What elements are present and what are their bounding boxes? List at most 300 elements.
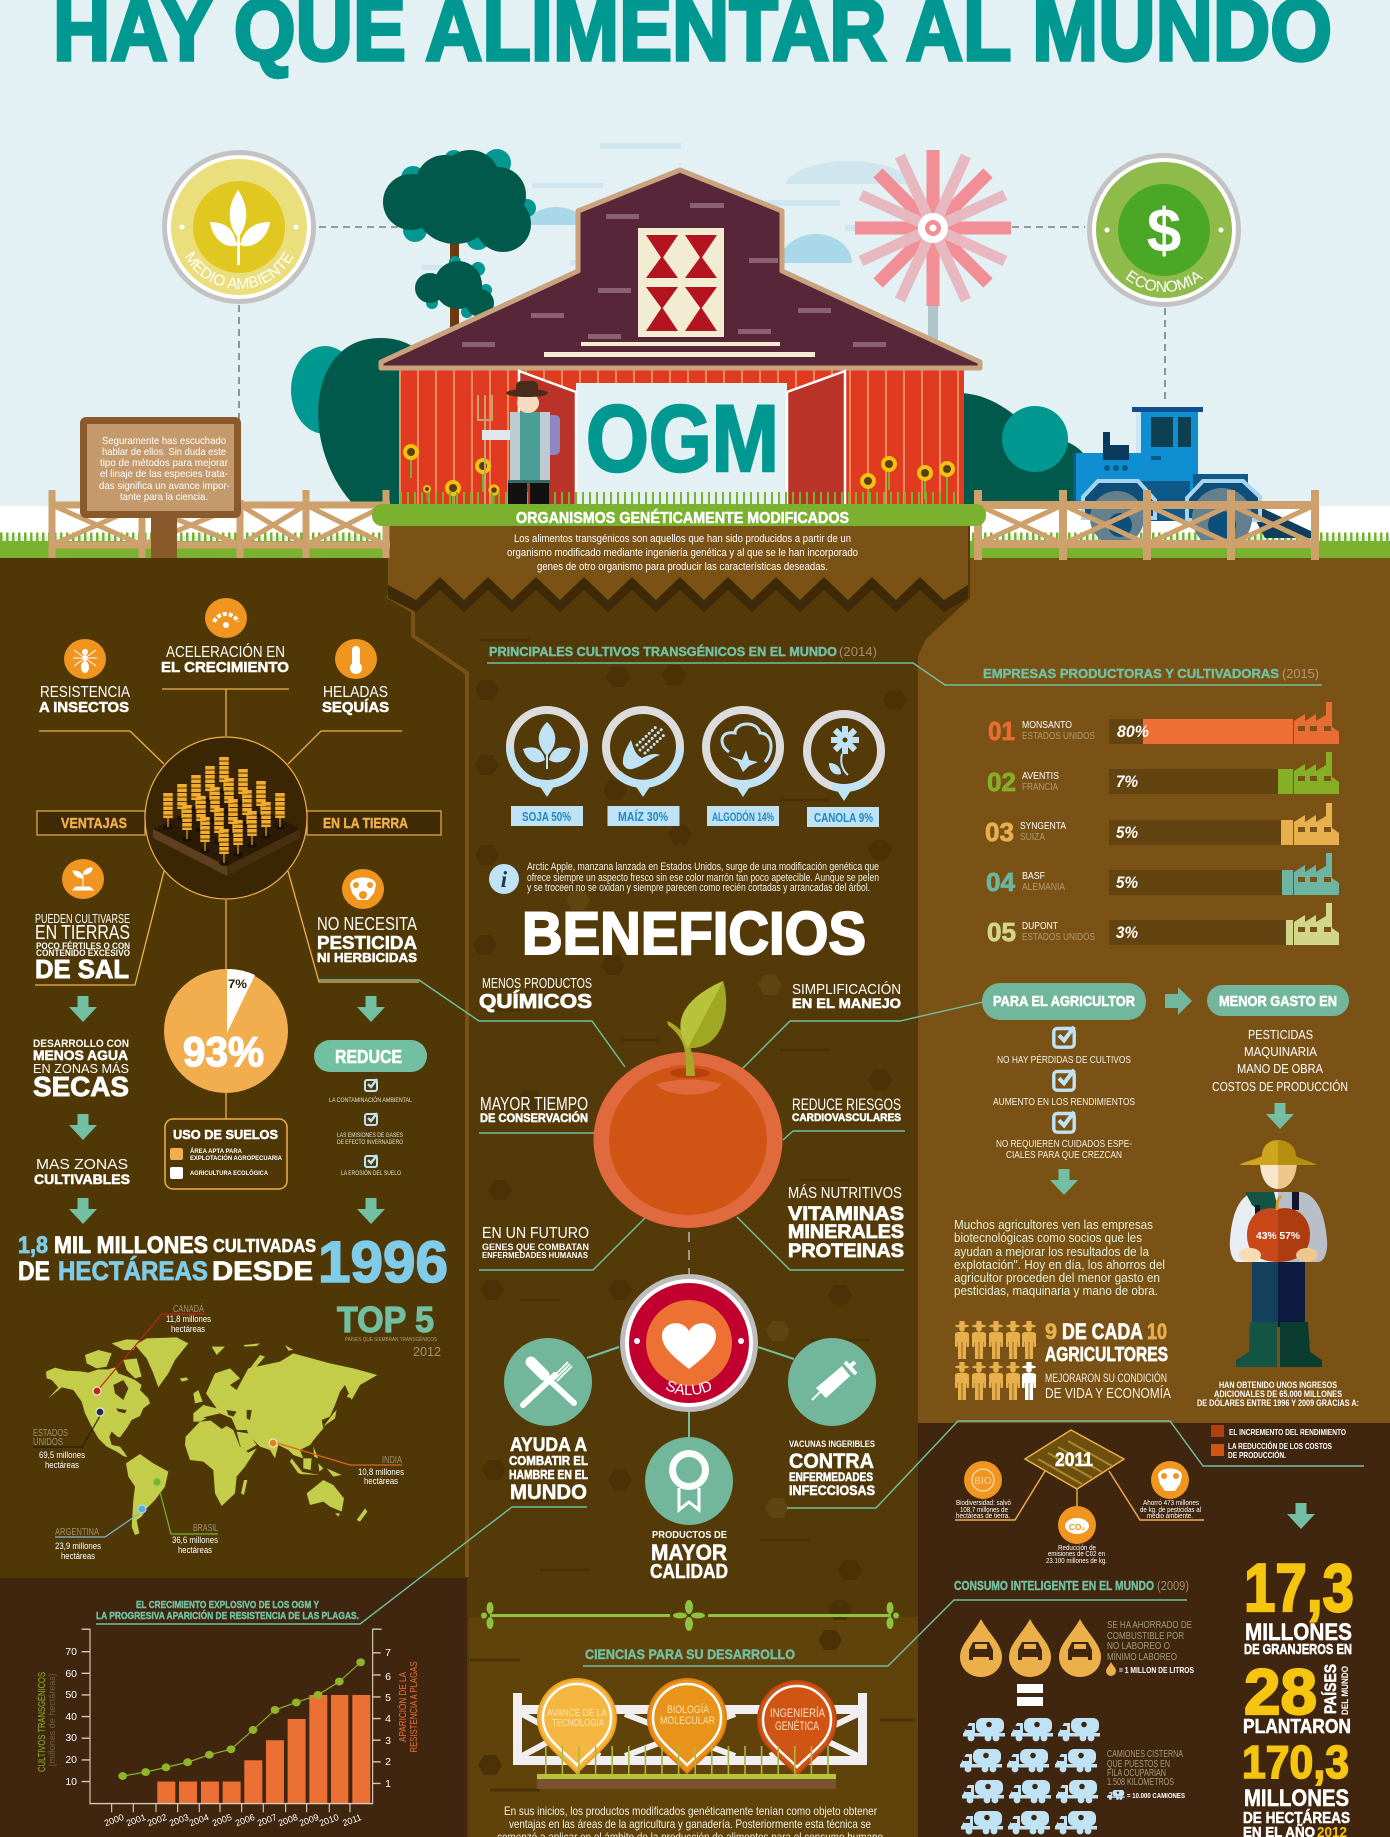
tractor xyxy=(1073,407,1315,548)
map labels: hectáreas xyxy=(178,1545,212,1555)
map labels xyxy=(33,1302,404,1561)
connector lines xyxy=(35,689,419,1119)
illustration: apple xyxy=(594,981,782,1228)
fuel notes: QUE PUESTOS EN xyxy=(1107,1759,1170,1770)
list: menor gasto: COSTOS DE PRODUCCIÓN xyxy=(1212,1079,1348,1094)
pin: ingenieria genetica: GENÉTICA xyxy=(775,1720,819,1733)
fuel notes xyxy=(1106,1620,1194,1800)
chart axis labels: 20 xyxy=(65,1754,77,1766)
pin: biologia molecular: BIOLOGÍA xyxy=(667,1703,710,1716)
OGM label: OGM xyxy=(586,386,779,492)
health: hambre: COMBATIR EL xyxy=(509,1453,588,1468)
health: calidad: PRODUCTOS DE xyxy=(652,1529,727,1541)
left column benefits: PUEDEN CULTIVARSE xyxy=(35,911,130,926)
income legend: EL INCREMENTO DEL RENDIMIENTO xyxy=(1229,1427,1346,1437)
barn xyxy=(381,170,980,506)
wooden sign: das significa un avance impor- xyxy=(99,480,230,492)
paragraph: agricultores: ayudan a mejorar los resultados de la xyxy=(954,1244,1150,1259)
info note: arctic apple: i xyxy=(501,867,508,892)
ventajas ribbon: VENTAJAS xyxy=(61,815,127,832)
stats: granjeros: DEL MUNDO xyxy=(1340,1666,1350,1715)
crop: maiz: MAÍZ 30% xyxy=(618,809,668,824)
company: syngenta: 5% xyxy=(1116,823,1138,842)
benefits labels: EN EL MANEJO xyxy=(792,995,901,1011)
benefits labels: MAYOR TIEMPO xyxy=(480,1094,588,1114)
income legend: LA REDUCCIÓN DE LOS COSTOS xyxy=(1228,1440,1332,1451)
health: vacunas: VACUNAS INGERIBLES xyxy=(789,1439,875,1449)
benefits labels: SIMPLIFICACIÓN xyxy=(792,981,901,998)
paragraph: agricultores: biotecnológicas como socios que les xyxy=(954,1230,1142,1245)
intro text: genes de otro organismo para producir las características deseadas. xyxy=(537,561,828,573)
reduce list: LAS EMISIONES DE GASES xyxy=(337,1132,404,1139)
heading: consumo inteligente: CONSUMO INTELIGENTE EN EL MUNDO xyxy=(954,1578,1154,1593)
arrow: to totals xyxy=(1287,1503,1315,1529)
stats: granjeros: 17,3 xyxy=(1244,1550,1354,1626)
chart: crecimiento y resistencia: 2011 xyxy=(341,1812,363,1828)
left column benefits: CONTENIDO EXCESIVO xyxy=(36,948,130,958)
fuel notes: CAMIONES CISTERNA xyxy=(1107,1749,1183,1760)
tanker trucks xyxy=(960,1718,1100,1834)
icon: gas mask xyxy=(342,869,384,909)
fuel notes: 1.508 KILÓMETROS xyxy=(1107,1775,1174,1788)
intro text: organismo modificado mediante ingeniería genética y al que se le han incorporado xyxy=(507,547,858,559)
stats: granjeros: 28 xyxy=(1244,1656,1317,1728)
left column benefits: DE SAL xyxy=(35,954,129,984)
heading: consumo inteligente: (2009) xyxy=(1157,1578,1189,1593)
company: basf: ALEMANIA xyxy=(1022,882,1065,893)
map labels: 10,8 millones xyxy=(358,1467,404,1477)
company: monsanto: 80% xyxy=(1117,722,1149,741)
company: aventis xyxy=(987,752,1339,797)
benefits labels: REDUCE RIESGOS xyxy=(792,1095,901,1114)
illustration: farmer with pumpkin xyxy=(1230,1140,1327,1367)
crop: algodon: ALGODÓN 14% xyxy=(712,809,774,824)
no necesita pesticida xyxy=(317,914,417,965)
paragraph: agricultores: Muchos agricultores ven las empresas xyxy=(954,1217,1153,1232)
center soil with zigzag xyxy=(388,526,968,612)
wooden sign: hablar de ellos. Sin duda este xyxy=(102,446,226,458)
country callouts xyxy=(33,1314,402,1537)
chart: crecimiento y resistencia: 2004 xyxy=(188,1812,210,1828)
chart: crecimiento y resistencia: (millones de hectáreas) xyxy=(47,1673,57,1767)
map labels: 69,5 millones xyxy=(39,1450,85,1460)
pill: menor gasto en: MENOR GASTO EN xyxy=(1219,993,1337,1010)
pin: ingenieria genetica xyxy=(758,1681,836,1775)
company: aventis: AVENTIS xyxy=(1022,771,1059,782)
left column benefits: EN TIERRAS xyxy=(35,922,130,944)
top 5 heading xyxy=(337,1299,441,1359)
paragraph: agricultores xyxy=(954,1217,1165,1298)
heading: principales cultivos: PRINCIPALES CULTIVOS TRANSGÉNICOS EN EL MUNDO xyxy=(489,644,837,659)
benefits labels: MÁS NUTRITIVOS xyxy=(788,1183,902,1202)
left column benefits: EN ZONAS MÁS xyxy=(33,1061,129,1076)
farmer benefits checklist: NO HAY PÉRDIDAS DE CULTIVOS xyxy=(997,1053,1131,1066)
labels: RESISTENCIA xyxy=(40,684,130,701)
icon: ant xyxy=(64,639,106,679)
2011 impact diagram xyxy=(955,1430,1204,1565)
company: aventis: 02 xyxy=(987,767,1016,797)
benefits labels xyxy=(479,975,904,1262)
badge: economia: ECONOMIA xyxy=(1126,270,1204,292)
company: monsanto: ESTADOS UNIDOS xyxy=(1022,731,1095,742)
2011 impact diagram: de kg. de pesticidas al xyxy=(1140,1505,1201,1514)
2011 impact diagram: 23.100 millones de kg. xyxy=(1046,1556,1107,1565)
chart axis labels: 3 xyxy=(385,1735,391,1747)
farmer with pitchfork xyxy=(478,381,560,505)
chart: crecimiento y resistencia: 2001 xyxy=(125,1812,147,1828)
paragraph: agricultores: pesticidas, maquinaria y mano de obra. xyxy=(954,1283,1158,1298)
labels xyxy=(39,642,389,716)
reduce list xyxy=(314,1040,427,1177)
wooden sign: el linaje de las especies trata- xyxy=(100,468,228,480)
left column benefits: MAS ZONAS xyxy=(36,1156,128,1173)
company: monsanto xyxy=(988,702,1339,746)
income note xyxy=(1197,1380,1359,1409)
chart: crecimiento y resistencia: 2003 xyxy=(168,1812,190,1828)
stats: granjeros: PLANTARON xyxy=(1243,1716,1351,1738)
benefits labels: QUÍMICOS xyxy=(479,990,592,1013)
no necesita pesticida: PESTICIDA xyxy=(317,933,417,953)
wheat field illustration xyxy=(145,737,307,899)
2011 impact diagram: Ahorró 473 millones xyxy=(1143,1498,1199,1507)
company: syngenta: SYNGENTA xyxy=(1020,821,1066,832)
illustration: farmer with pumpkin: 43% 57% xyxy=(1256,1231,1300,1242)
health: vacunas xyxy=(788,1338,876,1498)
no necesita pesticida: NI HERBICIDAS xyxy=(317,950,417,965)
fuel notes: = 1 MILLON DE LITROS xyxy=(1119,1665,1194,1675)
chart title xyxy=(96,1599,359,1622)
left column benefits: SECAS xyxy=(33,1071,129,1102)
chart: crecimiento y resistencia xyxy=(35,1599,420,1828)
barn roof xyxy=(381,170,980,368)
dashed connectors xyxy=(239,227,1165,590)
icon: bio: BIO xyxy=(974,1476,992,1487)
stats: granjeros: 170,3 xyxy=(1242,1736,1349,1788)
icon: acceleration gauge xyxy=(205,598,247,638)
legend: uso de suelos: EXPLOTACIÓN AGROPECUARIA xyxy=(190,1153,282,1162)
2011 impact diagram: 2011 xyxy=(1055,1450,1093,1471)
icon: co2 xyxy=(1058,1506,1096,1544)
pie chart: uso de suelos: 7% xyxy=(228,977,247,991)
labels: HELADAS xyxy=(323,684,388,701)
left column benefits: CULTIVABLES xyxy=(34,1171,130,1187)
chart: crecimiento y resistencia: CULTIVOS TRANSGÉNICOS xyxy=(35,1672,48,1772)
headline: hectareas: DESDE xyxy=(212,1256,313,1286)
benefits labels: DE CONSERVACIÓN xyxy=(480,1110,588,1125)
health: calidad: MAYOR xyxy=(651,1540,727,1565)
icon: mask xyxy=(1151,1461,1189,1499)
heading: ciencias: CIENCIAS PARA SU DESARROLLO xyxy=(585,1646,795,1662)
labels: A INSECTOS xyxy=(39,699,129,716)
company: basf: 04 xyxy=(986,867,1016,897)
pin: avance de la tecnologia: TECNOLOGÍA xyxy=(552,1716,604,1729)
health: vacunas: ENFERMEDADES xyxy=(789,1470,873,1484)
info note: arctic apple: y se troceen no se oxidan y siempre parecen como recién cortadas y arrancadas del árbol. xyxy=(527,882,870,894)
stats: granjeros: PAÍSES xyxy=(1321,1664,1340,1714)
labels: SEQUÍAS xyxy=(322,699,389,716)
map labels: hectáreas xyxy=(45,1460,79,1470)
health: calidad: CALIDAD xyxy=(650,1561,728,1583)
fuel notes: NO LABOREO O xyxy=(1107,1641,1170,1652)
left column benefits: POCO FÉRTILES O CON xyxy=(36,941,130,951)
pill: menor gasto en xyxy=(1207,985,1349,1016)
fuel notes: FILA OCUPARÍAN xyxy=(1107,1766,1166,1779)
heading: empresas: EMPRESAS PRODUCTORAS Y CULTIVADORAS xyxy=(983,666,1279,681)
info note: arctic apple: ofrece siempre un aspecto fresco sin ese color marrón tan poco apetecible. Aunque se pelen xyxy=(527,872,879,884)
company: syngenta: SUIZA xyxy=(1020,832,1045,843)
map labels: hectáreas xyxy=(61,1551,95,1561)
benefits labels: ENFERMEDADES HUMANAS xyxy=(482,1251,589,1260)
crop: soja: SOJA 50% xyxy=(522,809,571,824)
chart: crecimiento y resistencia: RESISTENCIA A PLAGAS xyxy=(408,1662,420,1752)
chart axis labels: 2 xyxy=(385,1756,391,1768)
stats: granjeros: MILLONES xyxy=(1245,1619,1352,1646)
chart axis labels: 60 xyxy=(65,1668,77,1680)
pictogram: 9 de cada 10: AGRICULTORES xyxy=(1045,1344,1168,1366)
reduce list: LA EROSIÓN DEL SUELO xyxy=(341,1168,401,1177)
2011 impact diagram: 108,7 millones de xyxy=(960,1505,1008,1514)
no necesita pesticida: NO NECESITA xyxy=(317,914,417,934)
pie chart: uso de suelos xyxy=(164,969,288,1093)
map labels: 11,8 millones xyxy=(166,1314,211,1324)
map labels: BRASIL xyxy=(193,1522,218,1534)
income legend: DE PRODUCCIÓN. xyxy=(1228,1449,1286,1460)
barn window xyxy=(638,228,724,337)
chart axis labels: 40 xyxy=(65,1711,77,1723)
legend: uso de suelos xyxy=(165,1119,287,1189)
legend: uso de suelos: ÁREA APTA PARA xyxy=(190,1146,242,1155)
benefits labels: CARDIOVASCULARES xyxy=(792,1112,901,1124)
arrow: to farmer xyxy=(1266,1103,1294,1129)
benefits labels: PROTEINAS xyxy=(788,1241,904,1262)
trees xyxy=(291,149,1100,506)
company: dupont xyxy=(987,903,1339,947)
headline: hectareas: DE xyxy=(18,1256,50,1286)
badge: salud xyxy=(620,1274,758,1412)
crop: algodon xyxy=(706,710,780,826)
company: basf xyxy=(986,853,1339,897)
info note: arctic apple: Arctic Apple, manzana lanzada en Estados Unidos, surge de una modificación genética que xyxy=(527,861,879,873)
icon: co2: CO₂ xyxy=(1069,1522,1085,1532)
pictogram: 9 de cada 10: MEJORARON SU CONDICIÓN xyxy=(1045,1372,1167,1385)
2011 impact diagram: emisiones de C02 en xyxy=(1048,1549,1105,1558)
clouds xyxy=(422,143,913,270)
paragraph: agricultores: agricultor proceden del menor gasto en xyxy=(954,1270,1160,1285)
map labels: 23,9 millones xyxy=(55,1541,101,1551)
en la tierra ribbon xyxy=(307,811,441,835)
crop: canola xyxy=(807,714,881,827)
2011 impact diagram: Reducción de xyxy=(1058,1543,1096,1552)
map labels: 36,6 millones xyxy=(172,1535,218,1545)
benefits labels: VITAMINAS xyxy=(788,1204,904,1225)
pictogram: 9 de cada 10: 9 xyxy=(1045,1319,1057,1344)
chart: crecimiento y resistencia: 2008 xyxy=(277,1812,299,1828)
pictogram: 9 de cada 10: 10 xyxy=(1147,1319,1167,1344)
farmer benefits checklist: NO REQUIEREN CUIDADOS ESPE- xyxy=(996,1138,1132,1150)
company: dupont: DUPONT xyxy=(1022,921,1058,932)
company: aventis: 7% xyxy=(1116,772,1138,791)
heading: empresas: (2015) xyxy=(1282,666,1319,681)
headline: hectareas xyxy=(18,1230,448,1295)
income note: ADICIONALES DE 65.000 MILLONES xyxy=(1214,1389,1342,1400)
company ranking bars xyxy=(985,702,1339,947)
chart axis labels: 5 xyxy=(385,1692,391,1704)
chart axis labels: 7 xyxy=(385,1647,391,1659)
pin: avance de la tecnologia xyxy=(538,1679,616,1773)
labels: EL CRECIMIENTO xyxy=(161,659,289,676)
company: aventis: FRANCIA xyxy=(1022,782,1058,793)
chart axis labels xyxy=(65,1646,391,1790)
pin: ingenieria genetica: INGENIERÍA xyxy=(770,1707,825,1720)
company: dupont: 05 xyxy=(987,917,1016,947)
income legend xyxy=(1211,1425,1346,1460)
badge: salud: SALUD xyxy=(666,1381,712,1395)
health: hambre: HAMBRE EN EL xyxy=(509,1467,588,1482)
left column benefits: DESARROLLO CON xyxy=(33,1038,129,1050)
reduce list: LA CONTAMINACIÓN AMBIENTAL xyxy=(329,1095,412,1104)
icon: bio xyxy=(964,1461,1002,1499)
company: monsanto: MONSANTO xyxy=(1022,720,1072,731)
drops with cars xyxy=(960,1619,1101,1677)
pin: avance de la tecnologia: AVANCE DE LA xyxy=(547,1707,607,1719)
left column benefits xyxy=(33,911,130,1187)
panel: ventajas en la tierra xyxy=(33,598,441,1224)
world map xyxy=(33,1314,402,1537)
paragraph: agricultores: explotación". Hoy en día, los ahorros del xyxy=(954,1257,1165,1272)
fences xyxy=(49,490,1319,560)
illustration: fence with science pins xyxy=(513,1679,867,1789)
chart title: LA PROGRESIVA APARICIÓN DE RESISTENCIA DE LAS PLAGAS. xyxy=(96,1609,359,1622)
list: menor gasto: MAQUINARIA xyxy=(1244,1044,1317,1059)
map labels: CANADÁ xyxy=(173,1302,204,1315)
benefits labels: MINERALES xyxy=(788,1222,904,1243)
chart: crecimiento y resistencia: 2005 xyxy=(211,1812,233,1828)
benefits labels: MENOS PRODUCTOS xyxy=(482,975,592,992)
chart axis labels: 1 xyxy=(385,1778,391,1790)
crop: canola: CANOLA 9% xyxy=(814,810,873,825)
sky background xyxy=(0,0,1390,506)
farmer benefits checklist xyxy=(993,1027,1135,1195)
map labels: ARGENTINA xyxy=(55,1526,99,1538)
badge: medio ambiente xyxy=(162,150,316,304)
heading: principales cultivos: (2014) xyxy=(839,644,877,659)
map labels: UNIDOS xyxy=(33,1436,63,1448)
badge: medio ambiente: MEDIO AMBIENTE xyxy=(184,251,294,290)
windmill xyxy=(855,150,1011,350)
map labels: INDIA xyxy=(382,1454,402,1466)
barn doors xyxy=(576,383,787,506)
2011 impact diagram: Biodiversidad: salvó xyxy=(956,1498,1011,1507)
fuel notes: SE HA AHORRADO DE xyxy=(1107,1620,1192,1631)
company: syngenta: 03 xyxy=(985,817,1014,847)
chart axis labels: 10 xyxy=(65,1776,77,1788)
wooden sign: Seguramente has escuchado xyxy=(102,435,226,447)
company: basf: BASF xyxy=(1022,871,1045,882)
info note: arctic apple xyxy=(489,861,879,894)
wooden sign: tipo de métodos para mejorar xyxy=(100,457,228,469)
heading: beneficios: BENEFICIOS xyxy=(522,900,866,967)
crop: maiz xyxy=(606,710,680,826)
top 5 heading: PAÍSES QUE SIEMBRAN TRANSGÉNICOS xyxy=(345,1336,437,1343)
icon: thermometer xyxy=(335,639,377,679)
soil panels xyxy=(0,526,1390,1837)
crop: soja xyxy=(510,710,584,826)
chart: crecimiento y resistencia: 2007 xyxy=(256,1812,278,1828)
wooden sign: tante para la ciencia. xyxy=(120,491,208,503)
ventajas ribbon xyxy=(37,811,145,835)
legend: uso de suelos: USO DE SUELOS xyxy=(173,1127,278,1142)
health: hambre xyxy=(504,1338,592,1504)
badge: economia: $ xyxy=(1147,197,1181,266)
chart axis labels: 4 xyxy=(385,1713,391,1725)
chart: crecimiento y resistencia: 2009 xyxy=(298,1812,320,1828)
stats: granjeros: MILLONES xyxy=(1244,1785,1349,1812)
pie chart: uso de suelos: 93% xyxy=(183,1028,264,1075)
company: syngenta xyxy=(985,803,1339,847)
map labels: ESTADOS xyxy=(33,1427,68,1439)
income note: HAN OBTENIDO UNOS INGRESOS xyxy=(1219,1380,1337,1391)
stats: granjeros: DE GRANJEROS EN xyxy=(1244,1641,1352,1658)
stats: granjeros: DE HECTÁREAS xyxy=(1243,1808,1350,1827)
stats: granjeros xyxy=(1242,1550,1354,1837)
pin: biologia molecular xyxy=(648,1679,726,1773)
farmer benefits checklist: AUMENTO EN LOS RENDIMIENTOS xyxy=(993,1096,1135,1108)
health: vacunas: CONTRA xyxy=(789,1450,874,1473)
chart: crecimiento y resistencia: 2010 xyxy=(318,1812,340,1828)
list: menor gasto: PESTICIDAS xyxy=(1248,1027,1313,1042)
green band heading xyxy=(372,504,986,527)
pill: para el agricultor: PARA EL AGRICULTOR xyxy=(993,993,1135,1010)
health: calidad xyxy=(645,1437,733,1583)
soil texture xyxy=(470,640,915,1790)
legend: uso de suelos: AGRICULTURA ECOLÓGICA xyxy=(190,1168,268,1177)
left column benefits: MENOS AGUA xyxy=(33,1047,128,1063)
pin: biologia molecular: MOLECULAR xyxy=(660,1715,715,1727)
pictogram: 9 de cada 10: DE CADA xyxy=(1062,1319,1143,1344)
chart axis labels: 6 xyxy=(385,1671,391,1683)
badge: economia xyxy=(1087,153,1241,307)
paragraph: ciencias: ventajas en las áreas de la agricultura y ganadería. Posteriormente esta técnica se xyxy=(509,1817,871,1831)
company: basf: 5% xyxy=(1116,873,1138,892)
company: dupont: ESTADOS UNIDOS xyxy=(1022,932,1095,943)
chart: crecimiento y resistencia: 2000 xyxy=(103,1812,125,1828)
fuel notes: = 10.000 CAMIONES xyxy=(1127,1793,1185,1800)
ornamental divider xyxy=(481,1600,899,1631)
labels: ACELERACIÓN EN xyxy=(166,642,285,661)
headline: hectareas: 1996 xyxy=(318,1230,448,1295)
list: menor gasto xyxy=(1212,1027,1348,1094)
chart: crecimiento y resistencia: APARICIÓN DE LA xyxy=(396,1672,409,1742)
chart: crecimiento y resistencia: 2002 xyxy=(146,1812,168,1828)
company: monsanto: 01 xyxy=(988,716,1015,746)
paragraph: ciencias: En sus inicios, los productos modificados genéticamente tenían como objeto obtener xyxy=(504,1804,877,1818)
icon: sprout xyxy=(62,859,104,899)
map labels: hectáreas xyxy=(364,1476,398,1486)
health: hambre: MUNDO xyxy=(510,1481,587,1504)
en la tierra ribbon: EN LA TIERRA xyxy=(323,815,408,832)
headline: hectareas: 1,8 xyxy=(18,1232,48,1259)
top 5 heading: TOP 5 xyxy=(337,1299,434,1340)
wooden sign xyxy=(80,417,241,558)
equals sign xyxy=(1017,1684,1043,1706)
headline: hectareas: HECTÁREAS xyxy=(58,1255,208,1286)
barn walls xyxy=(399,360,964,506)
chart title: EL CRECIMIENTO EXPLOSIVO DE LOS OGM Y xyxy=(136,1599,319,1611)
company: dupont: 3% xyxy=(1116,923,1138,942)
chart axis labels: 30 xyxy=(65,1732,77,1744)
reduce list: REDUCE xyxy=(335,1047,402,1067)
intro text xyxy=(507,533,858,573)
